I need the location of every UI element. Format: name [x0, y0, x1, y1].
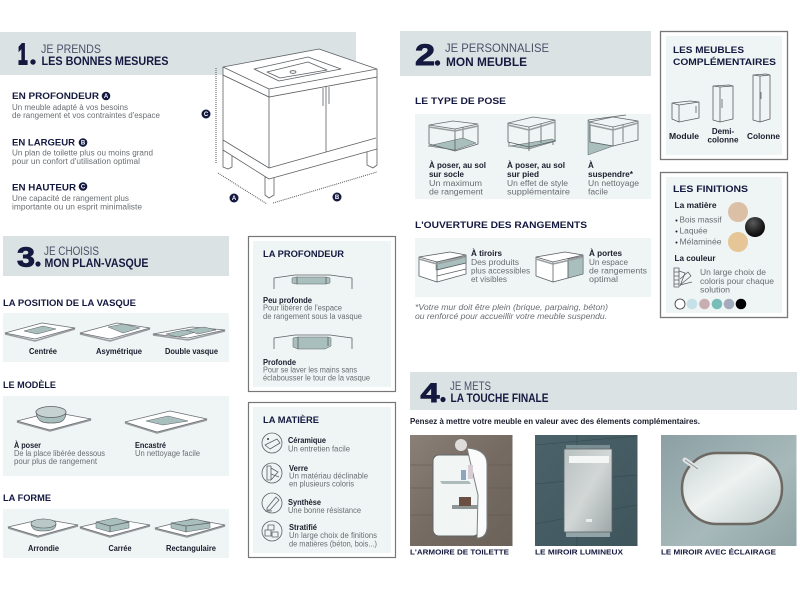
dimension marker A [230, 194, 238, 202]
section 1 banner: 1 [18, 39, 28, 71]
section 4 intro text: Pensez à mettre votre meuble en valeur avec des élements complémentaires. [410, 417, 700, 426]
label: arrondie: Arrondie [28, 544, 60, 553]
icon: verre [262, 463, 282, 483]
icon: rectangulaire [155, 519, 225, 537]
icon: pose sur pied [508, 117, 556, 151]
footnote [415, 303, 608, 321]
en largeur: Un plan de toilette plus ou moins grand [12, 148, 153, 158]
section 4 banner: JE METS [450, 379, 491, 393]
section 3 banner: 3 [17, 242, 35, 272]
heading: le type de pose: LE TYPE DE POSE [415, 96, 506, 106]
text: à portes: Un espace [589, 258, 629, 267]
icon: colonne [753, 74, 770, 122]
panel: les finitions [660, 172, 788, 318]
text: synthèse [288, 498, 362, 515]
text: à poser sur socle: Un maximum [429, 179, 482, 188]
caption: miroir lumineux: LE MIROIR LUMINEUX [535, 548, 623, 556]
text: stratifié: Stratifié [289, 523, 318, 532]
text: à suspendre [588, 161, 640, 196]
panel: type de pose [415, 114, 651, 199]
text: à poser sur pied: À poser, au sol [507, 161, 565, 170]
label: demi-colonne: colonne [708, 136, 739, 144]
colour swatches [675, 299, 746, 309]
la couleur text: coloris pour chaque [700, 277, 775, 286]
section 1 text: measurements [12, 91, 161, 212]
panel: la matière [248, 402, 396, 558]
text: synthèse: Synthèse [288, 498, 322, 507]
text: à poser sur socle: de rangement [429, 188, 484, 196]
text: à suspendre: Un nettoyage [588, 179, 640, 188]
panel: ouverture des rangements [415, 238, 651, 297]
icon: stratifié [262, 521, 282, 541]
section 4 banner: LA TOUCHE FINALE [450, 391, 548, 405]
panel: les meubles complémentaires: COMPLÉMENTAIRES [673, 56, 776, 67]
icon: carrée [80, 518, 150, 537]
photo: miroir lumineux [535, 435, 638, 546]
text: à suspendre: facile [588, 188, 609, 196]
panel: position de la vasque [3, 313, 229, 362]
text: verre [289, 464, 369, 488]
en hauteur: EN HAUTEUR [12, 182, 76, 192]
en hauteur: Une capacité de rangement plus [12, 194, 129, 203]
text: à poser [14, 441, 105, 466]
icon: céramique [262, 433, 282, 453]
la couleur text: solution [700, 286, 730, 294]
text: à poser: De la place libérée dessous [14, 449, 105, 458]
text: encastré [135, 441, 201, 458]
text: à poser sur socle: sur socle [429, 170, 465, 179]
heading: la position de la vasque: LA POSITION DE LA VASQUE [3, 298, 136, 308]
label: demi-colonne [708, 127, 739, 144]
label: colonne: Colonne [747, 132, 781, 141]
panel: les finitions: LES FINITIONS [673, 184, 748, 194]
la couleur text: Un large choix de [700, 268, 767, 277]
text: céramique: Céramique [288, 436, 326, 445]
panel: les meubles complémentaires: LES MEUBLES [673, 45, 744, 55]
text: encastré: Encastré [135, 441, 167, 450]
section 3 banner: MON PLAN-VASQUE [44, 256, 148, 270]
panel: le modèle [3, 396, 229, 476]
text: verre: en plusieurs coloris [289, 480, 354, 488]
text: profonde: éclabousser le tour de la vasque [263, 374, 371, 382]
panel: les meubles complémentaires [660, 32, 788, 160]
la matière list: Mélaminée [680, 238, 722, 246]
diagram: profonde [274, 335, 352, 349]
icon: module [672, 101, 699, 122]
heading: le modèle: LE MODÈLE [3, 379, 56, 390]
photo: miroir avec éclairage [661, 435, 796, 546]
text: à poser: À poser [14, 441, 41, 450]
icon: centrée [5, 323, 75, 341]
text: à portes: optimal [589, 275, 618, 284]
text: verre: Un matériau déclinable [289, 472, 369, 480]
en largeur: pour un confort d'utilisation optimal [12, 157, 140, 166]
text: encastré: Un nettoyage facile [135, 449, 201, 458]
en hauteur: importante ou un esprit minimaliste [12, 202, 143, 212]
panel: la forme [3, 509, 229, 558]
icon: asymétrique [80, 323, 150, 341]
section 1 banner: LES BONNES MESURES [42, 54, 168, 68]
text: à portes: de rangements [589, 266, 647, 276]
dimension marker C: C [204, 112, 209, 118]
en hauteur: C [81, 185, 86, 191]
text: peu profonde [263, 296, 363, 321]
text: à poser sur socle: À poser, au sol [429, 161, 486, 170]
la matière list: La matière [674, 201, 717, 210]
en largeur: EN LARGEUR [12, 138, 75, 148]
panel: la profondeur: LA PROFONDEUR [263, 249, 344, 259]
text: profonde: Profonde [263, 358, 297, 367]
en largeur [12, 138, 153, 166]
en profondeur: EN PROFONDEUR [12, 91, 99, 101]
dimension marker C [202, 110, 210, 118]
icon: vasque à poser [17, 406, 91, 431]
dimension marker B [332, 192, 342, 202]
caption: miroir avec éclairage: LE MIROIR AVEC ÉCLAIRAGE [661, 548, 776, 556]
text: à portes: À portes [589, 249, 623, 258]
material swatches [728, 202, 765, 252]
en profondeur [12, 91, 161, 120]
icon: portes [536, 252, 583, 282]
text: peu profonde: de rangement sous la vasque [263, 312, 363, 321]
la couleur text [674, 254, 775, 294]
text: peu profonde: Pour libérer de l'espace [263, 304, 343, 312]
section 4 banner [410, 372, 797, 410]
label: centrée: Centrée [29, 347, 58, 356]
section 2 banner [400, 31, 651, 76]
text: à poser: pour plus de rangement [14, 457, 98, 466]
label: asymétrique: Asymétrique [96, 347, 143, 356]
section 2 banner: JE PERSONNALISE [445, 41, 549, 55]
text: profonde [263, 358, 371, 382]
text: à portes [589, 249, 647, 284]
text: à suspendre: À [588, 161, 594, 170]
en profondeur: Un meuble adapté à vos besoins [12, 103, 128, 112]
panel: la matière: LA MATIÈRE [263, 414, 319, 425]
label: double vasque: Double vasque [165, 347, 219, 356]
diagram: peu profonde [274, 275, 352, 289]
section 4 banner: 4 [420, 378, 440, 408]
text: verre: Verre [289, 464, 309, 473]
la matière list [674, 201, 722, 246]
panel: la profondeur [248, 236, 396, 392]
section 2 banner: 2 [415, 39, 435, 72]
text: stratifié: de matières (béton, bois...) [289, 540, 377, 548]
text: à poser sur pied: Un effet de style [507, 179, 569, 188]
text: à poser sur socle [429, 161, 486, 196]
caption: armoire de toilette: L'ARMOIRE DE TOILETTE [410, 548, 509, 556]
text: synthèse: Une bonne résistance [288, 506, 362, 515]
furniture dimension drawing [202, 49, 377, 204]
text: à tiroirs [471, 249, 530, 284]
section 2 banner: MON MEUBLE [446, 55, 527, 69]
text: stratifié: Un large choix de finitions [289, 531, 377, 540]
label: demi-colonne: Demi- [712, 127, 734, 136]
section 1 banner: JE PRENDS [41, 42, 101, 56]
icon: suspendu [588, 115, 638, 155]
text: céramique [288, 436, 351, 454]
footnote: ou renforcé pour accueillir votre meuble suspendu. [415, 312, 607, 321]
text: stratifié [289, 523, 377, 548]
label: carrée: Carrée [108, 544, 132, 553]
text: céramique: Un entretien facile [288, 444, 351, 454]
icon: colour fan [674, 268, 692, 287]
text: à poser sur pied [507, 161, 571, 196]
text: à tiroirs: et visibles [471, 275, 507, 284]
icon: tiroirs [419, 252, 466, 282]
heading: l'ouverture des rangements: L'OUVERTURE DES RANGEMENTS [415, 220, 587, 230]
en profondeur: A [104, 94, 109, 100]
text: à tiroirs: plus accessibles [471, 266, 530, 276]
la couleur text: La couleur [674, 254, 716, 263]
heading: la forme: LA FORME [3, 493, 51, 503]
icon: vasque encastrée [125, 411, 207, 433]
icon: pose sur socle [428, 121, 478, 151]
en profondeur: de rangement et vos contraintes d'espace [12, 111, 161, 120]
section 3 banner [3, 236, 229, 276]
icon: synthèse [262, 493, 282, 513]
text: peu profonde: Peu profonde [263, 296, 313, 305]
text: à tiroirs: À tiroirs [471, 249, 503, 258]
text: à tiroirs: Des produits [471, 258, 519, 267]
footnote: *Votre mur doit être plein (brique, parpaing, béton) [415, 303, 608, 312]
label: rectangulaire: Rectangulaire [166, 544, 217, 553]
text: profonde: Pour se laver les mains sans [263, 366, 357, 374]
dimension marker A: A [232, 196, 237, 202]
icon: arrondie [8, 519, 78, 537]
en hauteur [12, 182, 143, 212]
la matière list: Laquée [680, 226, 708, 236]
la matière list: Bois massif [680, 216, 722, 224]
dimension marker B: B [335, 195, 340, 201]
icon: double vasque [153, 327, 225, 340]
label: module: Module [669, 132, 700, 141]
section 1 banner [0, 32, 356, 75]
text: à suspendre: suspendre* [588, 170, 634, 179]
icon: demi-colonne [713, 85, 733, 122]
section 3 banner: JE CHOISIS [44, 244, 99, 258]
text: à poser sur pied: supplémentaire [507, 188, 571, 196]
en largeur: B [81, 141, 86, 147]
text: à poser sur pied: sur pied [507, 170, 539, 179]
photo: armoire de toilette [410, 435, 512, 546]
